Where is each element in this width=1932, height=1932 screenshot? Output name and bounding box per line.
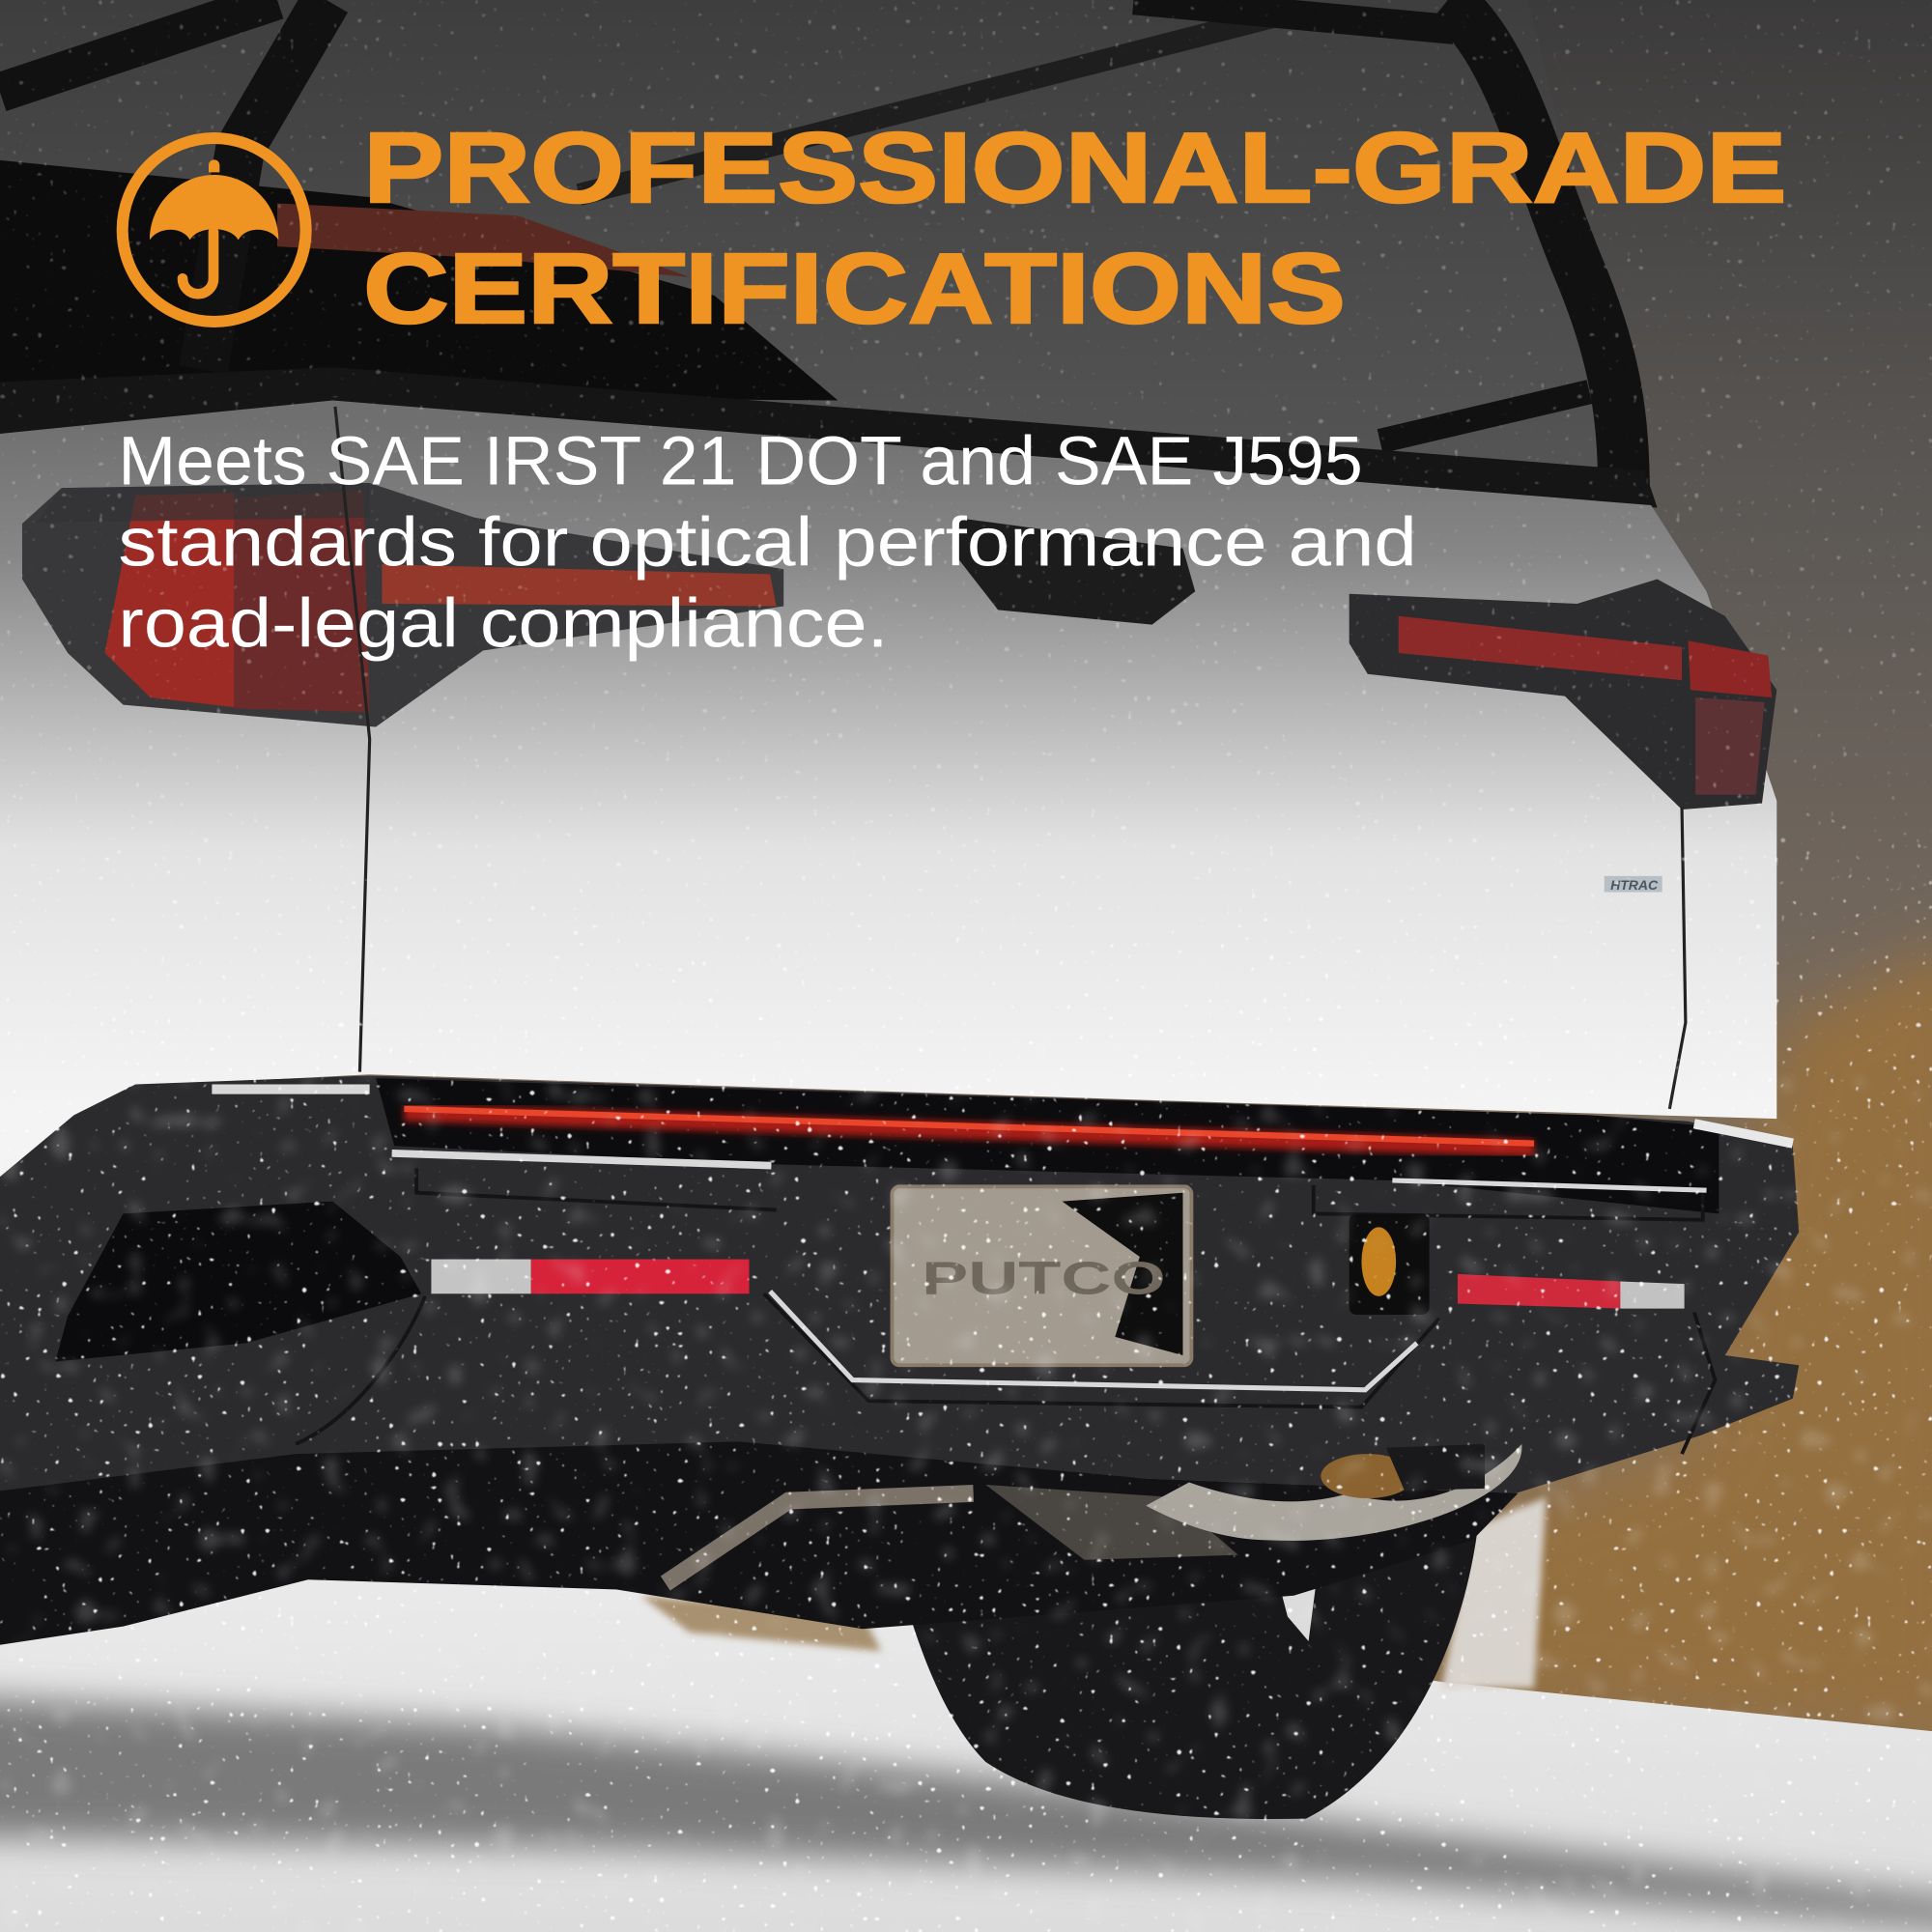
bumper vent xyxy=(55,1202,421,1361)
tailgate handle xyxy=(955,518,1195,625)
license plate frame: PUTCO xyxy=(922,1252,1166,1304)
title: PROFESSIONAL-GRADE xyxy=(363,111,1786,223)
amber marker light xyxy=(1350,1213,1430,1315)
wet road band xyxy=(0,1694,1932,1932)
body text: Meets SAE IRST 21 DOT and SAE J595 xyxy=(118,422,1363,499)
dark gap above bumper xyxy=(376,1078,1719,1213)
body text: standards for optical performance and xyxy=(118,503,1417,581)
title xyxy=(363,111,1786,344)
LED tailgate light bar xyxy=(404,1109,1534,1149)
snow behind the tire xyxy=(1441,1497,1547,1688)
snowy ground xyxy=(0,1559,1932,1932)
truck bed rail, dark xyxy=(0,160,838,401)
white body and tailgate xyxy=(0,401,1776,1189)
panel seams xyxy=(335,407,1686,1109)
top dark trim above tailgate xyxy=(0,367,1658,508)
underbody xyxy=(0,1441,1518,1645)
brown brush xyxy=(1448,936,1932,1735)
snow on bumper xyxy=(212,1090,1793,1390)
left tail glow in rear window xyxy=(277,203,690,277)
body text: road-legal compliance. xyxy=(118,585,889,663)
license plate frame xyxy=(892,1186,1191,1365)
snow on tire xyxy=(1271,1547,1321,1641)
left reflector xyxy=(431,1260,750,1293)
left tail light xyxy=(22,483,783,727)
falling snow, bokeh xyxy=(0,1060,1932,1932)
right tail light xyxy=(1350,579,1776,810)
title: CERTIFICATIONS xyxy=(363,232,1346,344)
bumper trim lines xyxy=(296,1168,1716,1454)
rear bumper xyxy=(0,1076,1799,1493)
right reflector xyxy=(1458,1274,1685,1309)
body text xyxy=(118,422,1417,663)
dry grass xyxy=(640,1596,881,1651)
icon: umbrella in circle xyxy=(123,138,306,322)
roof rack window area xyxy=(0,0,1651,493)
exhaust pipe and muffler xyxy=(666,1444,1521,1583)
rear tire xyxy=(906,1521,1479,1819)
HTRAC badge: HTRAC xyxy=(1610,877,1659,893)
rack bars xyxy=(0,0,1624,499)
